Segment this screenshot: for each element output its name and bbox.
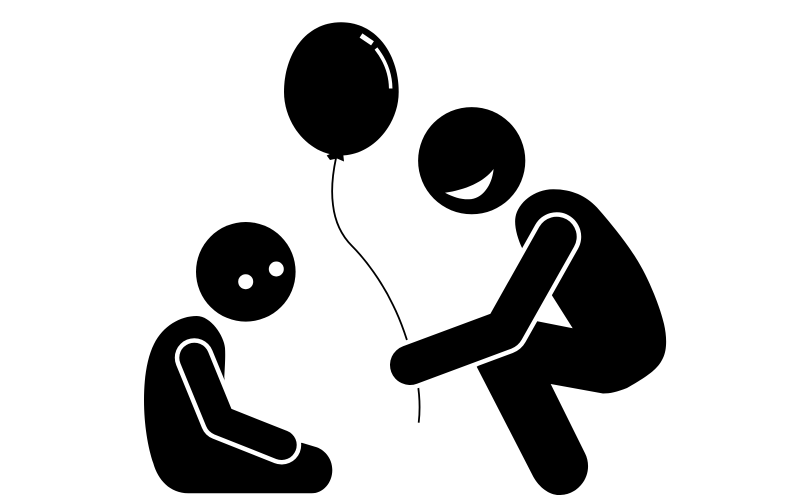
child arm bbox=[194, 358, 282, 445]
child figure bbox=[144, 222, 332, 493]
adult head bbox=[418, 107, 525, 214]
adult figure bbox=[410, 107, 666, 495]
child eyes bbox=[238, 262, 284, 289]
balloon string bbox=[332, 158, 420, 423]
child arm outline bbox=[194, 358, 282, 445]
adult arm outline bbox=[410, 237, 557, 365]
balloon bbox=[284, 22, 420, 423]
child body bbox=[144, 316, 332, 493]
child head bbox=[196, 222, 296, 322]
adult torso and legs bbox=[477, 189, 666, 495]
adult arm bbox=[410, 237, 557, 365]
adult smile bbox=[445, 169, 494, 199]
balloon body bbox=[284, 22, 399, 155]
balloon knot bbox=[327, 152, 344, 162]
balloon highlight bbox=[361, 36, 391, 88]
